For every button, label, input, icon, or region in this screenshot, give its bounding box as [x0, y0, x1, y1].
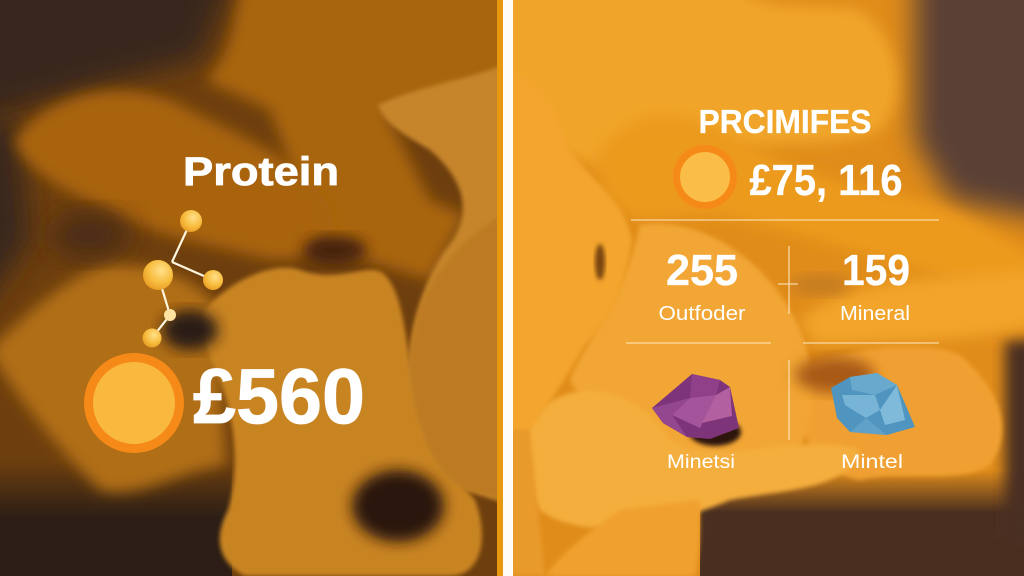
- icon: small coin: [673, 145, 737, 209]
- center divider: [497, 0, 513, 576]
- value: £560: £560: [193, 352, 365, 440]
- value: £75, 116: £75, 116: [750, 156, 902, 205]
- grid lines: [626, 220, 939, 440]
- stat: 255 Outfoder: [658, 246, 746, 325]
- heading: PRCIMIFES: PRCIMIFES: [698, 103, 872, 140]
- icon: purple gem: [652, 374, 739, 439]
- right panel: minerals: [490, 0, 1024, 576]
- label: Minetsi: Minetsi: [667, 452, 735, 473]
- stat: 159 Mineral: 159: [842, 246, 910, 295]
- icon: blue gem: [831, 373, 915, 435]
- icon: molecule: [142, 210, 223, 348]
- stat: 159 Mineral: [840, 246, 910, 325]
- stat: 159 Mineral: Mineral: [840, 303, 910, 325]
- stat: 255 Outfoder: Outfoder: [658, 303, 746, 325]
- label: Mintel: Mintel: [841, 452, 903, 473]
- right photo background: [490, 0, 1024, 576]
- heading: Protein: Protein: [183, 150, 339, 194]
- icon: protein coin: [84, 353, 184, 453]
- left panel: protein: [0, 0, 530, 576]
- left photo background: [0, 0, 530, 576]
- stat: 255 Outfoder: 255: [666, 246, 738, 295]
